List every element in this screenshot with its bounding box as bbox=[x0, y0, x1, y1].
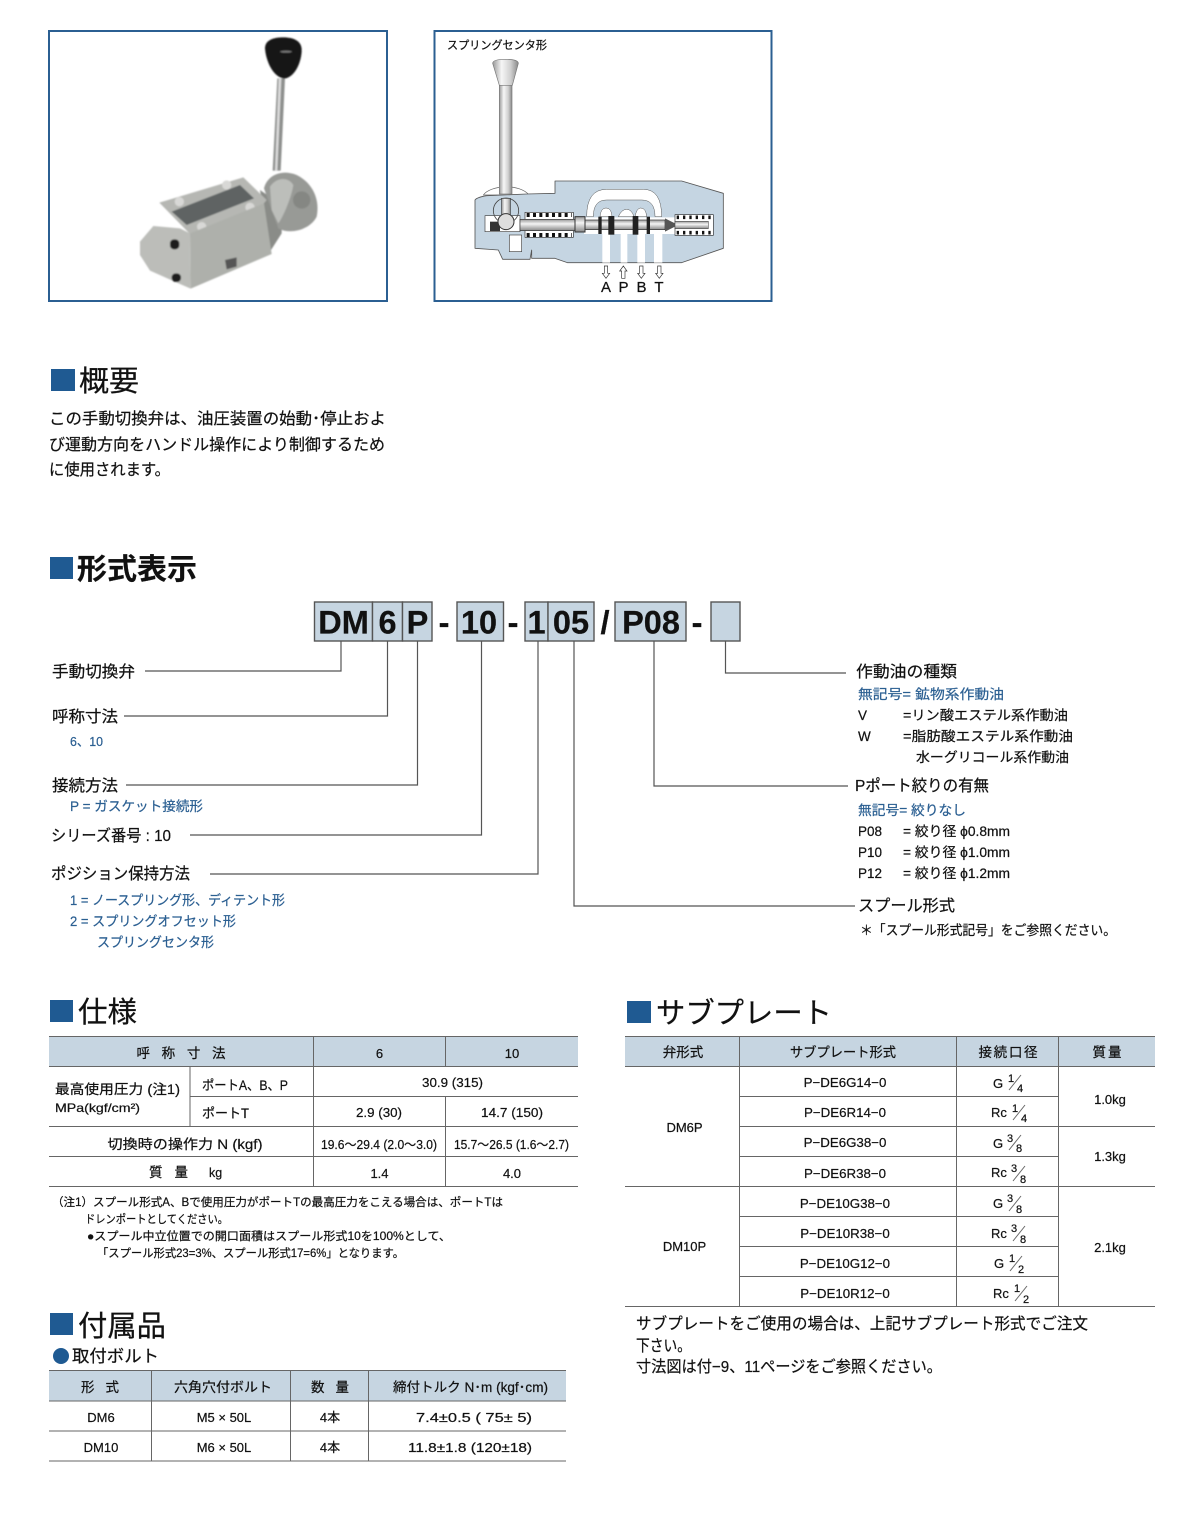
text block: subplate note: 寸法図は付−9、11ページをご参照ください。 bbox=[636, 1358, 942, 1376]
left labels: model code: 接続方法 bbox=[52, 777, 118, 795]
port sizes: Rc bbox=[991, 1165, 1007, 1180]
right labels: model code: 作動油の種類 bbox=[856, 663, 957, 681]
model code boxes: 05 bbox=[553, 604, 589, 640]
port sizes: G bbox=[993, 1076, 1003, 1091]
table: mounting bolts: M6 × 50L bbox=[197, 1440, 251, 1455]
port labels: T bbox=[654, 279, 664, 296]
left labels: model code: 2 = スプリングオフセット形 bbox=[70, 914, 236, 929]
model code boxes: - bbox=[508, 604, 518, 640]
subplate rows: P−DE6R38−0 bbox=[804, 1166, 886, 1181]
right labels: model code: V bbox=[858, 708, 867, 723]
subplate rows: 1.0kg bbox=[1094, 1092, 1126, 1107]
table footnotes: （注1）スプール形式A、Bで使用圧力がポートTの最高圧力をこえる場合は、ポートTは bbox=[52, 1195, 503, 1209]
text block: overview: この手動切換弁は、油圧装置の始動･停止およ bbox=[49, 410, 386, 428]
left labels: model code: 手動切換弁 bbox=[52, 663, 135, 681]
table: specifications: 10 bbox=[505, 1046, 519, 1061]
port sizes: G bbox=[993, 1136, 1003, 1151]
table: mounting bolts: M5 × 50L bbox=[197, 1410, 251, 1425]
table: subplate bbox=[625, 1036, 1155, 1306]
table: specifications: 30.9 (315) bbox=[422, 1075, 483, 1090]
table: specifications: kg bbox=[209, 1166, 222, 1180]
subplate rows: P−DE10G12−0 bbox=[800, 1256, 890, 1271]
table: specifications: 質 量 bbox=[149, 1165, 188, 1180]
table: mounting bolts: 4本 bbox=[320, 1440, 340, 1455]
port sizes: Rc bbox=[991, 1226, 1007, 1241]
right labels: model code: =脂肪酸エステル系作動油 bbox=[903, 729, 1073, 744]
model code boxes bbox=[314, 602, 740, 641]
right labels: model code: 無記号= 絞りなし bbox=[858, 803, 966, 818]
right labels: model code bbox=[855, 663, 1116, 938]
subplate header: サブプレート形式 bbox=[790, 1044, 896, 1060]
table: specifications bbox=[49, 1036, 578, 1186]
diagram: valve cross section bbox=[475, 59, 723, 278]
port sizes: 4 bbox=[1021, 1113, 1027, 1125]
subplate header: 接続口径 bbox=[978, 1044, 1038, 1060]
right labels: model code: = 絞り径 ϕ1.0mm bbox=[903, 845, 1010, 860]
model code boxes: 6 bbox=[378, 604, 397, 640]
table: specifications: 切換時の操作力 N (kgf) bbox=[108, 1137, 262, 1152]
table: mounting bolts bbox=[49, 1370, 566, 1461]
leader lines bbox=[124, 641, 855, 906]
heading: specifications: 仕様 bbox=[78, 996, 137, 1029]
model code boxes: 10 bbox=[461, 604, 497, 640]
table footnotes: ●スプール中立位置での開口面積はスプール形式10を100%として、 bbox=[87, 1229, 451, 1243]
panel: product photo bbox=[49, 31, 387, 301]
table footnotes: 「スプール形式23=3%、スプール形式17=6%」となります。 bbox=[97, 1247, 404, 1260]
table footnotes bbox=[52, 1195, 503, 1260]
left labels: model code: 呼称寸法 bbox=[52, 708, 118, 726]
right labels: model code: 水ーグリコール系作動油 bbox=[916, 750, 1069, 765]
left labels: model code: ポジション保持方法 bbox=[51, 865, 190, 883]
right labels: model code: = 絞り径 ϕ0.8mm bbox=[903, 824, 1010, 839]
right labels: model code: = 絞り径 ϕ1.2mm bbox=[903, 866, 1010, 881]
right labels: model code: P10 bbox=[858, 845, 882, 860]
table: mounting bolts: DM6 bbox=[87, 1410, 115, 1425]
right labels: model code: P08 bbox=[858, 824, 882, 839]
right labels: model code: =リン酸エステル系作動油 bbox=[903, 708, 1068, 723]
model code boxes: / bbox=[600, 604, 610, 640]
heading: overview: 概要 bbox=[79, 365, 139, 398]
table: specifications: 19.6〜29.4 (2.0〜3.0) bbox=[321, 1138, 437, 1152]
table: mounting bolts: 11.8±1.8 (120±18) bbox=[408, 1440, 532, 1455]
table: specifications: 呼 称 寸 法 bbox=[136, 1046, 226, 1061]
port sizes: 3 bbox=[1007, 1193, 1013, 1205]
model code boxes: P bbox=[407, 604, 428, 640]
table: specifications: ポートA、B、P bbox=[202, 1078, 288, 1093]
table: specifications: 15.7〜26.5 (1.6〜2.7) bbox=[454, 1138, 569, 1152]
model code boxes: - bbox=[692, 604, 702, 640]
heading: specifications bbox=[50, 996, 137, 1029]
subheading: mounting bolts: 取付ボルト bbox=[72, 1347, 159, 1366]
text block: overview bbox=[49, 410, 386, 479]
subplate header: 質量 bbox=[1092, 1045, 1122, 1060]
port labels: P bbox=[618, 279, 629, 296]
table: mounting bolts: 締付トルク N･m (kgf･cm) bbox=[393, 1380, 548, 1395]
subplate rows: 1.3kg bbox=[1094, 1149, 1126, 1164]
table: mounting bolts: 形 式 bbox=[81, 1380, 120, 1395]
right labels: model code: 無記号= 鉱物系作動油 bbox=[858, 687, 1004, 702]
port sizes: 1 bbox=[1008, 1073, 1014, 1085]
port sizes: 1 bbox=[1009, 1253, 1015, 1265]
table: mounting bolts: 数 量 bbox=[311, 1380, 349, 1395]
heading: overview bbox=[51, 365, 139, 398]
subplate rows: DM6P bbox=[666, 1120, 703, 1135]
port sizes: 8 bbox=[1020, 1234, 1026, 1246]
subplate rows: 2.1kg bbox=[1094, 1240, 1126, 1255]
table: specifications: ポートT bbox=[202, 1106, 249, 1121]
port sizes: Rc bbox=[993, 1286, 1009, 1301]
port labels: A bbox=[601, 279, 611, 296]
left labels: model code: 1 = ノースプリング形、ディテント形 bbox=[70, 892, 285, 908]
table footnotes: ドレンポートとしてください。 bbox=[85, 1213, 228, 1226]
right labels: model code: P12 bbox=[858, 866, 882, 881]
left labels: model code: シリーズ番号 : 10 bbox=[51, 827, 171, 845]
table: specifications: 14.7 (150) bbox=[481, 1105, 543, 1120]
panel: sectional diagram, spring center type bbox=[434, 31, 772, 301]
table: specifications: 2.9 (30) bbox=[356, 1105, 402, 1120]
model code boxes: 1 bbox=[527, 604, 546, 640]
port labels: B bbox=[636, 279, 647, 296]
subplate rows: P−DE10R12−0 bbox=[800, 1286, 890, 1301]
subplate rows: P−DE10G38−0 bbox=[800, 1196, 890, 1211]
model code boxes: DM bbox=[318, 604, 369, 640]
table: specifications: 6 bbox=[376, 1046, 383, 1061]
port sizes: 2 bbox=[1018, 1264, 1024, 1276]
port sizes: 1 bbox=[1014, 1283, 1020, 1295]
port sizes: 3 bbox=[1011, 1163, 1017, 1175]
subplate rows: P−DE6R14−0 bbox=[804, 1105, 886, 1120]
left labels: model code: スプリングセンタ形 bbox=[97, 935, 214, 950]
model code boxes: P08 bbox=[622, 604, 680, 640]
diagram caption: スプリングセンタ形 bbox=[447, 38, 547, 52]
subplate rows bbox=[663, 1075, 1126, 1301]
subplate rows: P−DE6G38−0 bbox=[804, 1135, 886, 1150]
table: mounting bolts: 7.4±0.5 ( 75± 5) bbox=[416, 1410, 532, 1425]
subplate rows: P−DE6G14−0 bbox=[804, 1075, 886, 1090]
table: mounting bolts: 4本 bbox=[320, 1410, 340, 1425]
icon: valve photograph bbox=[140, 37, 317, 289]
table: specifications: 4.0 bbox=[503, 1166, 521, 1181]
left labels: model code: 6、10 bbox=[70, 734, 103, 749]
right labels: model code: ＊「スプール形式記号」をご参照ください。 bbox=[860, 923, 1116, 938]
text block: subplate note: 下さい。 bbox=[636, 1337, 691, 1355]
table: specifications: 1.4 bbox=[370, 1166, 389, 1181]
table: specifications: MPa(kgf/cm²) bbox=[55, 1101, 140, 1115]
subplate header: 弁形式 bbox=[663, 1045, 704, 1060]
port sizes: 2 bbox=[1023, 1294, 1029, 1306]
port sizes bbox=[991, 1073, 1029, 1306]
table: specifications: 最高使用圧力 (注1) bbox=[55, 1081, 180, 1097]
port sizes: 4 bbox=[1017, 1083, 1023, 1095]
heading: model code: 形式表示 bbox=[77, 553, 197, 586]
subplate header bbox=[663, 1044, 1122, 1060]
port sizes: Rc bbox=[991, 1105, 1007, 1120]
port sizes: 3 bbox=[1007, 1133, 1013, 1145]
subplate rows: DM10P bbox=[663, 1239, 706, 1254]
left labels: model code: P = ガスケット接続形 bbox=[70, 798, 203, 814]
subplate rows: P−DE10R38−0 bbox=[800, 1226, 890, 1241]
right labels: model code: Pポート絞りの有無 bbox=[855, 777, 989, 795]
text block: subplate note bbox=[636, 1314, 1088, 1376]
heading: subplate: サブプレート bbox=[656, 997, 832, 1030]
text block: subplate note: サブプレートをご使用の場合は、上記サブプレート形式でご注文 bbox=[636, 1314, 1088, 1333]
right labels: model code: W bbox=[858, 729, 871, 744]
heading: accessories: 付属品 bbox=[78, 1310, 166, 1343]
right labels: model code: スプール形式 bbox=[858, 897, 955, 915]
text block: overview: に使用されます。 bbox=[49, 461, 170, 479]
table: mounting bolts: DM10 bbox=[84, 1440, 118, 1455]
port labels bbox=[601, 279, 664, 296]
table: mounting bolts: 六角穴付ボルト bbox=[174, 1380, 272, 1395]
text block: overview: び運動方向をハンドル操作により制御するため bbox=[49, 436, 385, 454]
model code boxes: - bbox=[439, 604, 449, 640]
port sizes: 8 bbox=[1020, 1174, 1026, 1186]
left labels: model code bbox=[51, 663, 285, 950]
port sizes: 1 bbox=[1012, 1103, 1018, 1115]
port sizes: 8 bbox=[1016, 1143, 1022, 1155]
port sizes: G bbox=[993, 1196, 1003, 1211]
port sizes: 3 bbox=[1011, 1223, 1017, 1235]
port sizes: G bbox=[994, 1256, 1004, 1271]
port sizes: 8 bbox=[1016, 1204, 1022, 1216]
